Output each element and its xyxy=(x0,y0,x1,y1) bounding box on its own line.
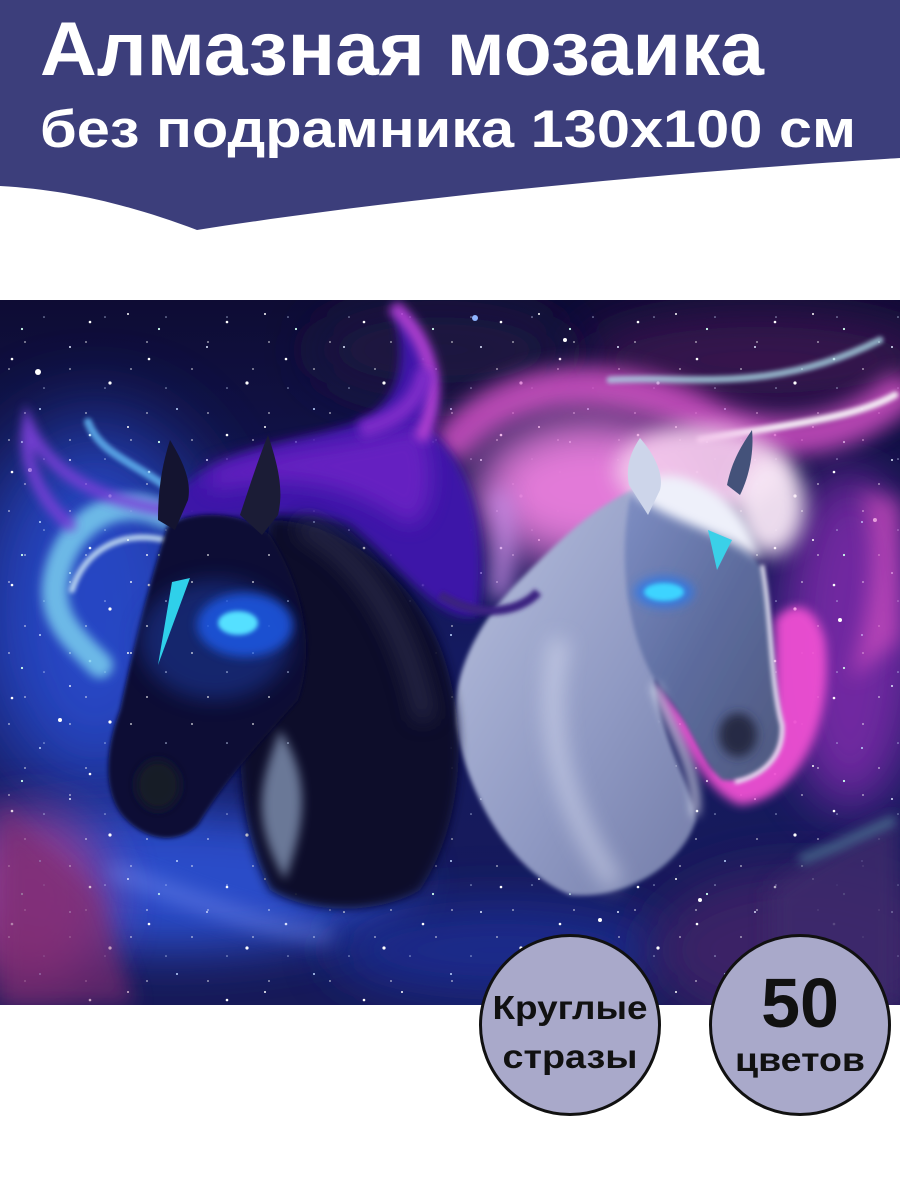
horse: left mane wisps xyxy=(27,422,170,665)
black horse eye xyxy=(218,611,258,635)
black horse nose xyxy=(136,760,180,810)
title: subheading: без подрамника 130х100 см xyxy=(40,100,856,159)
title: main heading: Алмазная мозаика xyxy=(40,7,765,92)
horse: purple mane xyxy=(165,305,481,616)
horse: black horse body xyxy=(108,435,459,909)
black horse glow patch xyxy=(197,593,293,657)
stars xyxy=(0,300,900,1005)
badge: round rhinestones xyxy=(480,936,660,1114)
foreground nebula xyxy=(0,800,900,1005)
horse: white horse body xyxy=(455,430,782,896)
black horse chest highlight xyxy=(262,730,302,880)
horse: white mane pink flow xyxy=(455,340,895,590)
badge: 50 colours: 50 xyxy=(761,964,839,1042)
black horse ears xyxy=(158,440,189,530)
white horse nose xyxy=(719,713,757,757)
white horse blaze xyxy=(708,530,732,570)
black horse face star dust xyxy=(140,580,290,700)
mane wisp over white neck xyxy=(440,592,538,611)
title banner xyxy=(0,0,900,230)
black horse blaze xyxy=(158,578,190,665)
picture: two cosmic horses xyxy=(0,300,900,1030)
badge: 50 colours xyxy=(710,936,890,1114)
badge: round rhinestones: Круглые xyxy=(492,989,648,1026)
badge: round rhinestones: стразы xyxy=(502,1038,638,1075)
badge: 50 colours: цветов xyxy=(735,1041,865,1078)
white horse forelock xyxy=(630,476,760,560)
white horse ears xyxy=(628,438,661,515)
pink glow behind white horse xyxy=(650,490,900,805)
white horse eye xyxy=(634,576,694,608)
